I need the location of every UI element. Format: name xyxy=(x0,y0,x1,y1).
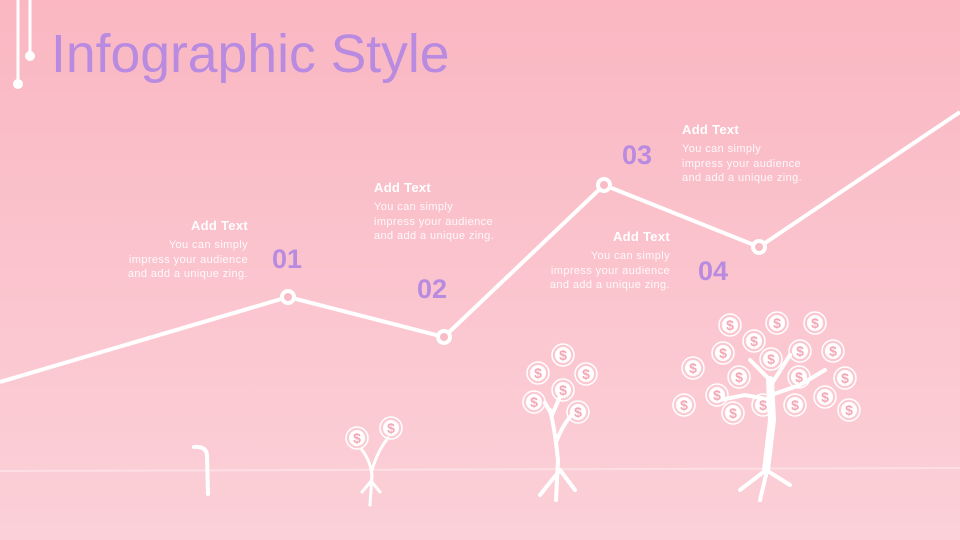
number 03: 03 xyxy=(622,140,652,170)
step 3 text: Add Text xyxy=(613,229,670,244)
step 2 text xyxy=(374,180,494,242)
step 3 text xyxy=(550,229,670,291)
step 2 text: Add Text xyxy=(374,180,431,195)
big tree xyxy=(720,355,825,500)
step 4 text: Add Text xyxy=(682,122,739,137)
step 4 text xyxy=(682,122,802,184)
small plant xyxy=(362,438,388,505)
step 4 text: You can simply xyxy=(682,143,761,155)
medium tree xyxy=(540,392,575,500)
step 3 text: You can simply xyxy=(591,250,670,262)
step 2 text: impress your audience xyxy=(374,216,493,228)
title: Infographic Style xyxy=(51,25,450,84)
sprout xyxy=(194,447,208,494)
step 4 text: and add a unique zing. xyxy=(682,172,802,184)
step 3 text: and add a unique zing. xyxy=(550,279,670,291)
step 1 text: impress your audience xyxy=(129,254,248,266)
number 01: 01 xyxy=(272,244,302,274)
step 1 text: and add a unique zing. xyxy=(128,268,248,280)
step 1 text: Add Text xyxy=(191,218,248,233)
step 4 text: impress your audience xyxy=(682,158,801,170)
step 3 text: impress your audience xyxy=(551,264,670,276)
number 02: 02 xyxy=(417,274,447,304)
number 04: 04 xyxy=(698,256,728,286)
step 1 text: You can simply xyxy=(169,239,248,251)
step 2 text: You can simply xyxy=(374,201,453,213)
step 2 text: and add a unique zing. xyxy=(374,230,494,242)
step 1 text xyxy=(128,218,248,280)
